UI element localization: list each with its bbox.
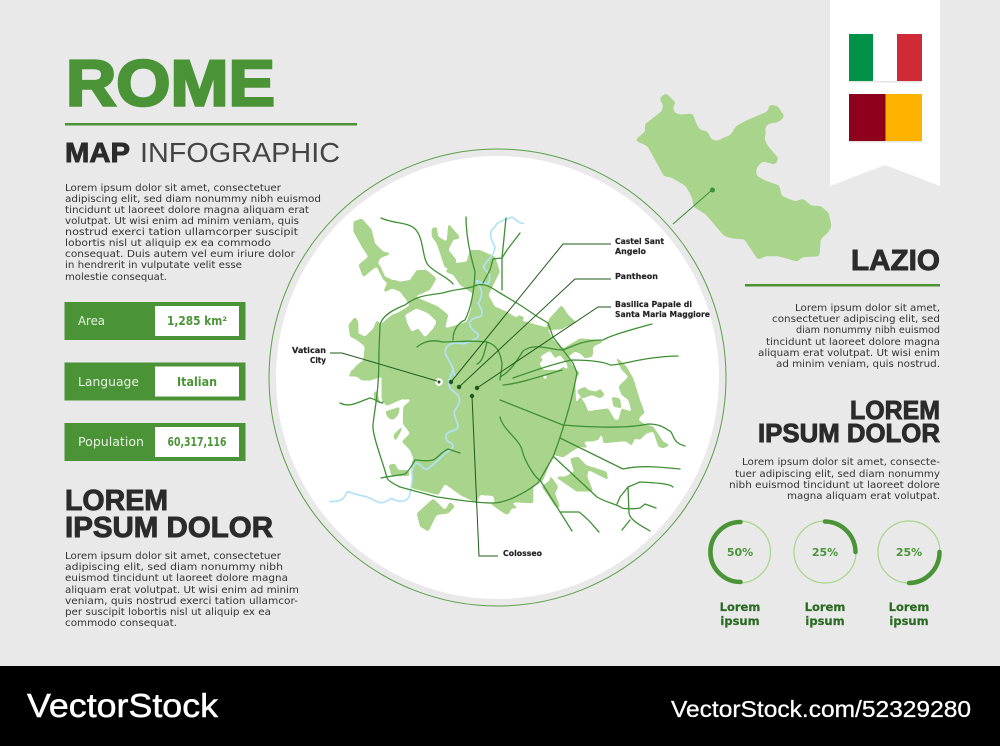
roads [340, 217, 685, 532]
stat: population [64, 423, 246, 461]
stat: area [64, 302, 246, 340]
map: Rome urban area [348, 218, 670, 532]
stat: population: Population [78, 435, 144, 449]
text block: Lazio: consectetuer adipiscing elit, sed [772, 314, 940, 325]
callout: Colosseo: Colosseo [503, 549, 543, 558]
donut: 25% first: 25% [812, 546, 838, 559]
ribbon with flags [830, 0, 940, 186]
text block: Lazio: tincidunt ut laoreet dolore magna [766, 337, 940, 348]
text block: left lower: adipiscing elit, sed diam nonummy nibh [65, 562, 283, 573]
title: MAP [65, 137, 130, 168]
text block: intro: adipiscing elit, sed diam nonummy nibh euismod [65, 194, 321, 205]
heading: lorem ipsum dolor left: IPSUM DOLOR [65, 512, 273, 544]
text block: intro: molestie consequat. [65, 272, 167, 283]
text block: right lower: tuer adipiscing elit, sed diam nonummy [735, 469, 940, 480]
callout: Castel Sant Angelo: Angelo [615, 247, 647, 256]
stat: language: Italian [177, 375, 217, 389]
stat: language [64, 362, 246, 400]
footer bar: VectorStock.com/52329280 [671, 696, 971, 722]
donut: 50%: ipsum [720, 614, 760, 628]
text block: left lower: per suscipit lobortis nisl ut aliquip ex ea [65, 607, 271, 618]
title: INFOGRAPHIC [140, 137, 340, 168]
callout: Castel Sant Angelo [449, 237, 664, 384]
text block: Lazio: ad minim veniam, quis nostrud. [776, 359, 940, 370]
heading: lorem ipsum dolor right: IPSUM DOLOR [758, 418, 940, 448]
text block: right lower [729, 457, 940, 502]
flag: Rome [849, 94, 922, 142]
text block: right lower: nibh euismod tincidunt ut laoreet dolore [729, 480, 940, 491]
heading: lorem ipsum dolor right: LOREM [850, 395, 940, 425]
text block: left lower: veniam, quis nostrud exerci tation ullamcor- [65, 596, 298, 607]
callout: Castel Sant Angelo: Castel Sant [615, 237, 664, 246]
stat: population: 60,317,116 [168, 435, 226, 449]
footer bar [0, 666, 1000, 746]
stat: area: Area [78, 314, 105, 328]
callout: Basilica Papale di Santa Maria Maggiore: Basilica Papale di [615, 300, 692, 309]
text block: intro: volutpat. Ut wisi enim ad minim veniam, quis [65, 216, 299, 227]
text block: left lower: aliquam erat volutpat. Ut wisi enim ad minim [65, 585, 299, 596]
text block: left lower: euismod tincidunt ut laoreet dolore magna [65, 573, 288, 584]
callout: Colosseo [470, 394, 543, 558]
heading: Lazio: LAZIO [851, 245, 940, 277]
text block: intro: in hendrerit in vulputate velit esse [65, 260, 242, 271]
text block: Lazio [758, 303, 940, 370]
text block: Lazio: Lorem ipsum dolor sit amet, [795, 303, 940, 314]
stat: area: 1,285 km² [167, 314, 227, 328]
flag: Italy [849, 34, 922, 82]
text block: intro: nostrud exerci tation ullamcorper suscipit [65, 227, 298, 238]
donut: 25% second: Lorem [889, 600, 929, 614]
text block: intro: Lorem ipsum dolor sit amet, consectetuer [65, 183, 282, 194]
text block: left lower: commodo consequat. [65, 618, 177, 629]
heading: lorem ipsum dolor right [758, 395, 940, 448]
callout: Vatican City [292, 346, 440, 384]
donut: 25% first [794, 521, 856, 628]
donut: 50%: Lorem [720, 600, 760, 614]
donut: 25% second: 25% [896, 546, 922, 559]
text block: Lazio: diam nonummy nibh euismod [796, 325, 940, 336]
footer bar: VectorStock [27, 687, 219, 724]
text block: right lower: magna aliquam erat volutpat. [787, 491, 940, 502]
heading: lorem ipsum dolor left [65, 485, 273, 544]
river Tiber [330, 217, 523, 503]
text block: intro [65, 183, 321, 283]
text block: intro: lobortis nisl ut aliquip ex ea commodo [65, 238, 271, 249]
callout: Pantheon [457, 272, 658, 389]
donut: 25% first: ipsum [805, 614, 845, 628]
donut: 25% second [878, 521, 940, 628]
callout: Basilica Papale di Santa Maria Maggiore: Santa Maria Maggiore [615, 310, 710, 319]
donut: 25% second: ipsum [889, 614, 929, 628]
heading: lorem ipsum dolor left: LOREM [65, 485, 168, 517]
title [65, 46, 357, 168]
text block: intro: tincidunt ut laoreet dolore magna aliquam erat [65, 205, 309, 216]
callout: Vatican City: Vatican [292, 346, 326, 355]
text block: left lower: Lorem ipsum dolor sit amet, consectetuer [65, 551, 282, 562]
callout: Basilica Papale di Santa Maria Maggiore [475, 300, 710, 390]
donut: 25% first: Lorem [805, 600, 845, 614]
title: ROME [66, 46, 275, 120]
text block: left lower [65, 551, 299, 629]
stat: language: Language [78, 375, 139, 389]
text block: right lower: Lorem ipsum dolor sit amet, consecte- [742, 457, 940, 468]
donut: 50%: 50% [727, 546, 753, 559]
callout: Vatican City: City [310, 356, 326, 365]
panel: central map circle [269, 149, 726, 606]
donut: 50% [708, 521, 770, 628]
text block: Lazio: aliquam erat volutpat. Ut wisi enim [758, 348, 940, 359]
callout: Pantheon: Pantheon [615, 272, 658, 281]
map: Lazio region [635, 93, 832, 262]
text block: intro: consequat. Duis autem vel eum iriure dolor [65, 249, 296, 260]
